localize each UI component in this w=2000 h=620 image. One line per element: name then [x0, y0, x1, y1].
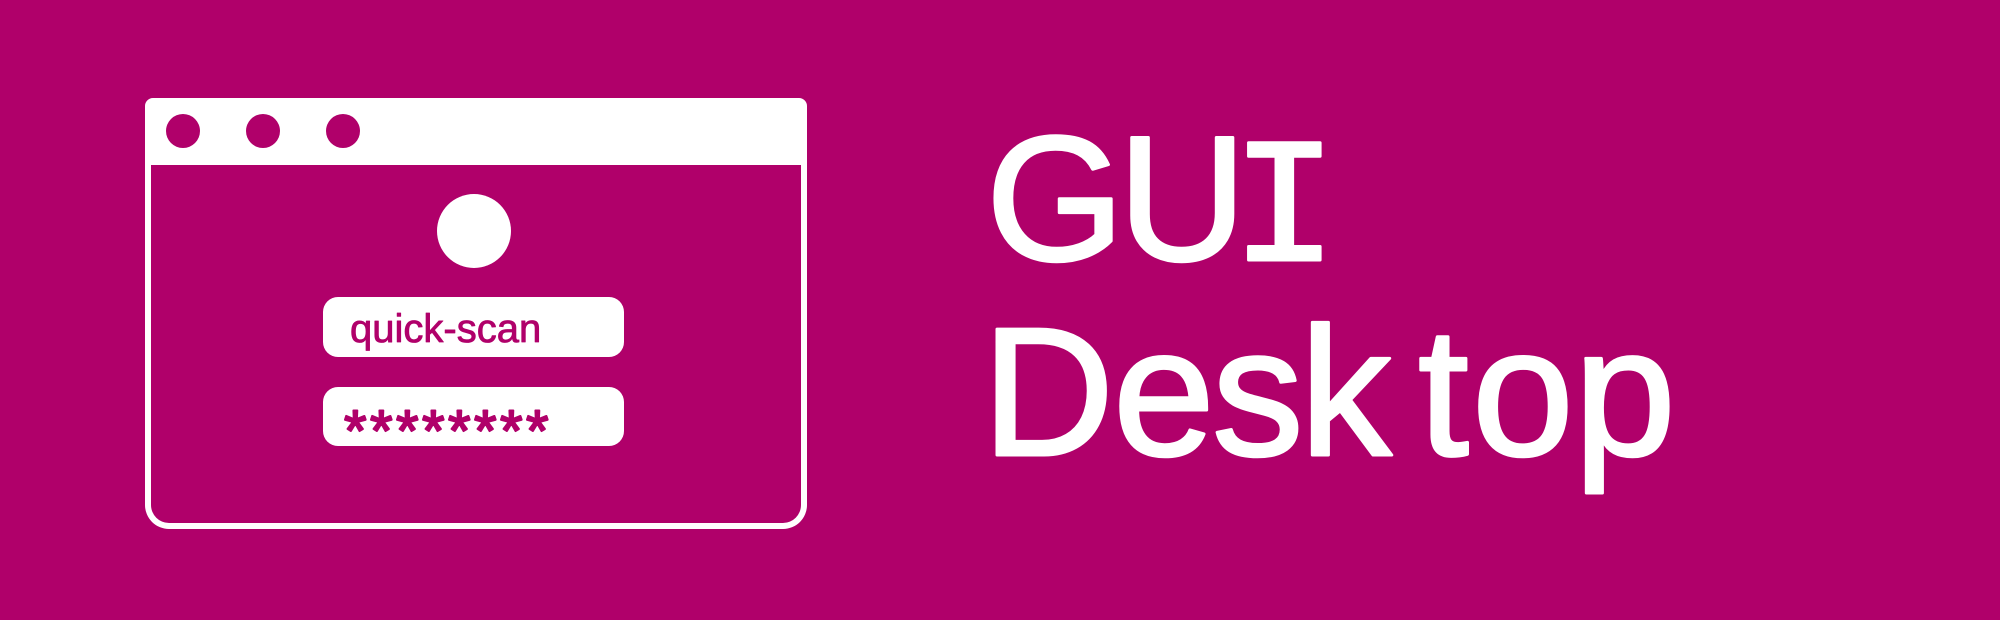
title line: GUI: U — [1118, 99, 1247, 298]
username field — [323, 297, 624, 357]
window control dots — [166, 114, 360, 148]
title line: Desktop: D — [982, 289, 1114, 494]
title line: GUI: G — [986, 99, 1124, 298]
password field: ******** — [344, 399, 549, 464]
window frame — [145, 98, 807, 529]
title line: GUI: I — [1231, 113, 1338, 314]
password field — [323, 387, 624, 464]
avatar circle — [437, 194, 511, 268]
title — [982, 99, 1676, 494]
username field: quick-scan — [350, 307, 541, 351]
title line: Desktop: k — [1300, 289, 1392, 494]
title line: Desktop: e — [1113, 289, 1215, 494]
title line: Desktop: o — [1472, 289, 1574, 494]
title line: Desktop: p — [1574, 289, 1676, 494]
icon: application window — [145, 98, 807, 529]
title line: Desktop: s — [1212, 289, 1304, 494]
title line: Desktop: t — [1418, 289, 1469, 494]
